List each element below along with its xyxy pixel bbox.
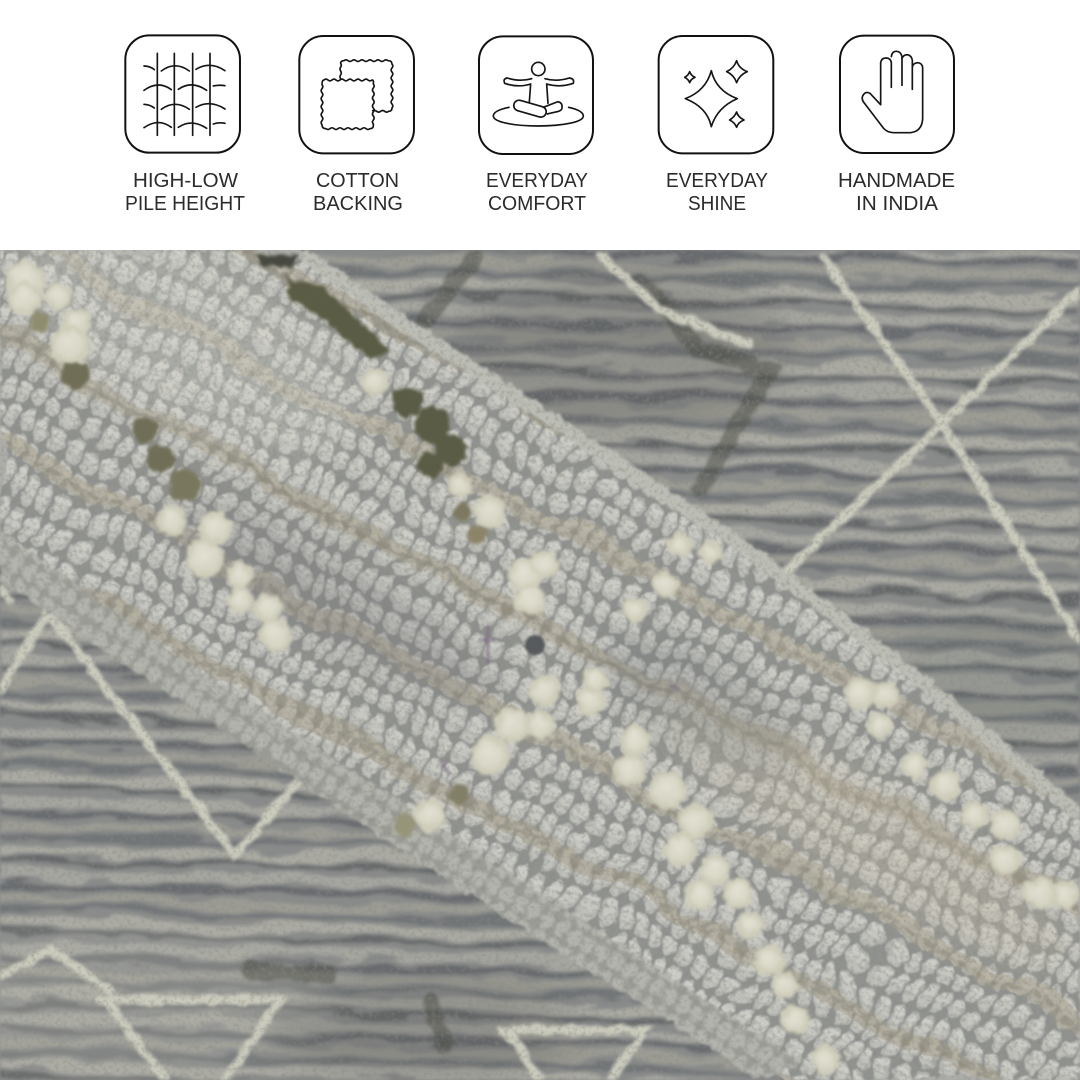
upper fuzzy edge	[300, 252, 1080, 815]
fine grain	[0, 250, 1080, 1080]
feature: high-low pile height	[125, 35, 245, 215]
label: COMFORT	[488, 193, 586, 215]
icon: fabric swatches	[299, 36, 414, 153]
lower fuzzy edge	[0, 530, 800, 1080]
light diamond motif lines	[0, 255, 1080, 1080]
background rug surface	[0, 250, 1080, 1080]
label	[486, 170, 588, 215]
dark olive tufts	[30, 255, 488, 837]
label: HIGH-LOW	[133, 170, 238, 192]
label	[313, 170, 403, 215]
tonal shading	[0, 270, 1080, 1080]
label: BACKING	[313, 193, 403, 215]
label: EVERYDAY	[666, 170, 768, 192]
white header background	[0, 0, 1080, 250]
feature: everyday shine	[659, 36, 773, 215]
tonal shading on band	[19, 250, 1056, 958]
icon: hand	[840, 36, 954, 153]
label	[838, 170, 955, 215]
feature: everyday comfort	[479, 36, 593, 215]
icon: sparkles	[659, 36, 773, 153]
feature: handmade in india	[838, 36, 955, 215]
cream tufts	[8, 263, 1077, 1072]
icon: weave grid	[125, 35, 240, 153]
label: PILE HEIGHT	[125, 193, 245, 215]
feature: cotton backing	[299, 36, 414, 215]
label: EVERYDAY	[486, 170, 588, 192]
dark and purple accents	[440, 625, 680, 775]
label	[125, 170, 245, 215]
icon: meditating person	[479, 36, 593, 154]
label: COTTON	[316, 170, 399, 192]
label: HANDMADE	[838, 170, 955, 192]
label	[666, 170, 768, 215]
label: SHINE	[688, 193, 746, 215]
darker diamond motif lines	[250, 258, 770, 1045]
label: IN INDIA	[856, 193, 939, 215]
